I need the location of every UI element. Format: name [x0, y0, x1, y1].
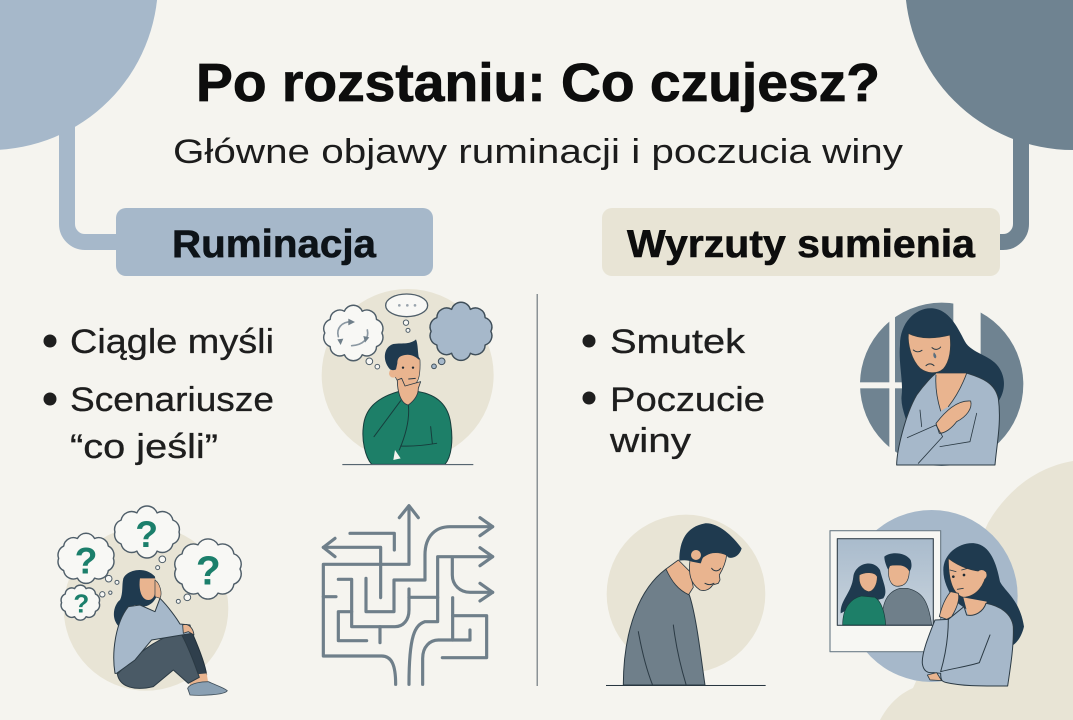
- question cloud: left: [58, 533, 119, 584]
- question cloud: right: [175, 539, 241, 603]
- question cloud: left: ?: [75, 539, 97, 581]
- sitting woman figure: [114, 570, 227, 695]
- title: Po rozstaniu: Co czujesz?: [196, 53, 880, 113]
- woman figure: [897, 308, 1004, 465]
- illustration: woman looking at a photo: [830, 510, 1024, 686]
- illustration: man with lowered head: [606, 515, 766, 686]
- question cloud: right: ?: [196, 547, 221, 593]
- divider: [536, 294, 538, 686]
- background shape: bottom right beige corner: [880, 461, 1073, 720]
- heading: Ruminacja: Ruminacja: [172, 223, 376, 266]
- question cloud: top: ?: [135, 513, 158, 555]
- bullet list: rumination symptoms: [44, 323, 274, 466]
- decorative circle: top right: [905, 0, 1073, 150]
- illustration: man thinking with thought clouds: [322, 289, 494, 465]
- window panes: [860, 302, 1024, 468]
- man figure: [623, 523, 742, 685]
- bullet list: remorse symptoms: Smutek: [610, 323, 746, 361]
- bullet list: remorse symptoms: winy: [609, 422, 691, 460]
- illustration: sad woman by a window: [860, 302, 1024, 468]
- bullet list: rumination symptoms: Scenariusze: [70, 381, 274, 419]
- question cloud: small: [61, 585, 112, 620]
- question cloud: small: ?: [73, 589, 89, 619]
- bullet list: rumination symptoms: “co jeśli”: [70, 428, 218, 466]
- heading: Ruminacja: [116, 208, 433, 276]
- heading: Wyrzuty sumienia: Wyrzuty sumienia: [627, 223, 975, 266]
- subtitle: Główne objawy ruminacji i poczucia winy: [173, 133, 903, 171]
- connector: left circle to Ruminacja: [67, 125, 120, 242]
- bullet list: rumination symptoms: Ciągle myśli: [70, 323, 274, 361]
- man figure: [363, 339, 452, 464]
- illustration: maze of paths with arrows: [323, 506, 493, 684]
- bullet list: remorse symptoms: Poczucie: [610, 381, 765, 419]
- instant photo of couple: [830, 531, 941, 652]
- thought cloud: blue: [430, 302, 492, 369]
- heading: Wyrzuty sumienia: [602, 208, 1000, 276]
- connector: right circle to Wyrzuty sumienia: [998, 125, 1021, 242]
- thought cloud: cycle arrows: [324, 305, 383, 369]
- thought bubble: ellipsis: [386, 294, 428, 332]
- illustration: woman with question marks: [58, 506, 241, 695]
- thoughtful woman figure: [922, 543, 1024, 686]
- decorative circle: top left: [0, 0, 158, 150]
- question cloud: top: [115, 506, 179, 570]
- bullet list: remorse symptoms: [582, 323, 765, 460]
